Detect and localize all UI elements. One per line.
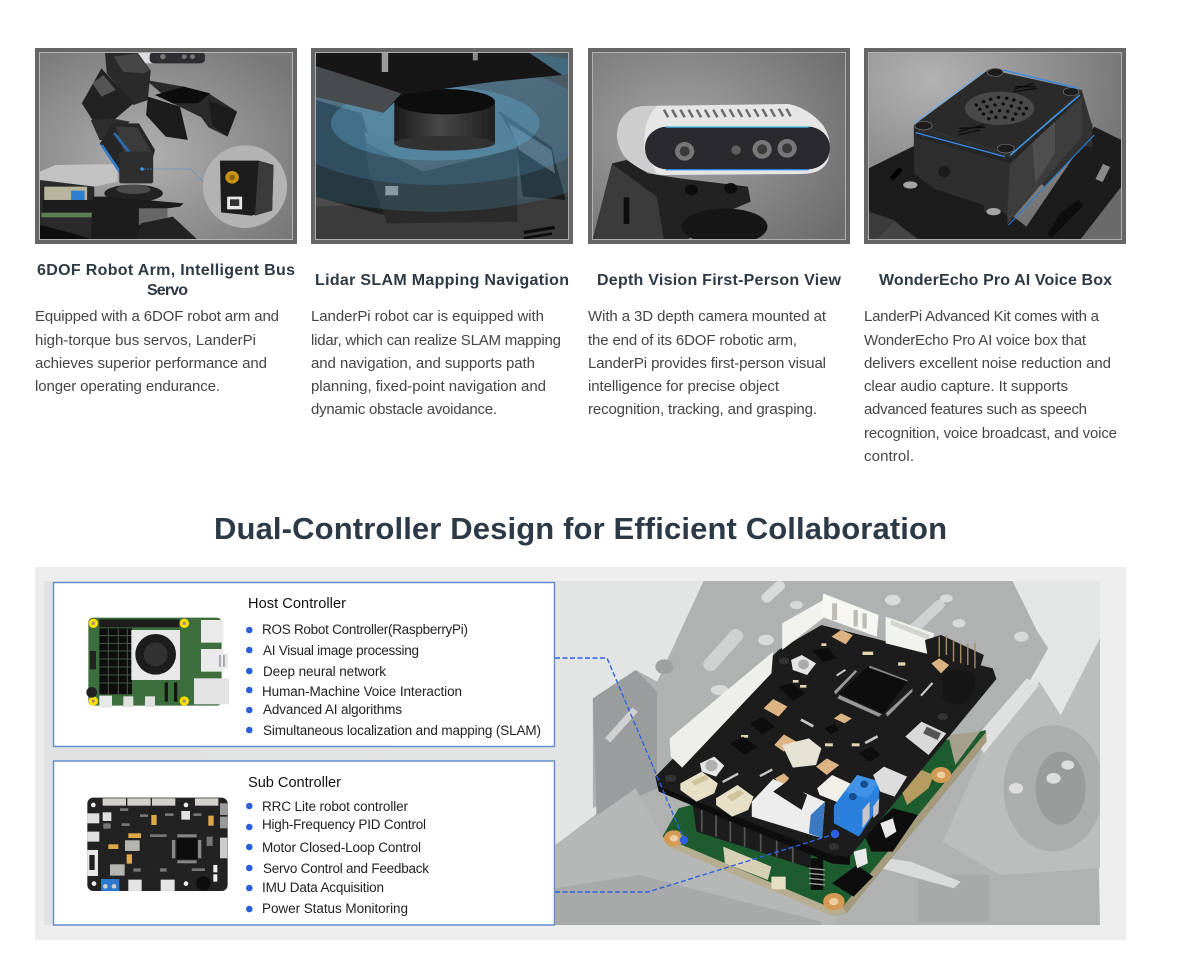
body: depth vision: recognition, tracking, and grasping.: [588, 401, 817, 418]
heading: robot arm: 6DOF Robot Arm, Intelligent Bus: [37, 262, 295, 279]
title: Dual-Controller Design for Efficient Collaboration: [214, 511, 947, 546]
panel: voice box image: [864, 48, 1126, 244]
body: depth vision: LanderPi provides first-person visual: [588, 355, 826, 372]
body: voice box: delivers excellent noise reduction and: [864, 355, 1111, 372]
text block: depth vision: [588, 272, 842, 418]
text block: voice box: [864, 272, 1117, 465]
body: lidar: planning, fixed-point navigation and: [311, 378, 546, 395]
body: voice box: advanced features such as speech: [864, 401, 1087, 418]
body: robot arm: [35, 308, 279, 395]
list: host controller features: Deep neural network: [263, 664, 386, 679]
body: voice box: [864, 308, 1117, 465]
body: voice box: LanderPi Advanced Kit comes with a: [864, 308, 1100, 325]
list: host controller features: Simultaneous localization and mapping (SLAM): [263, 723, 541, 738]
heading: robot arm: [37, 262, 295, 299]
list: host controller features: [246, 622, 541, 738]
list: host controller features: Advanced AI algorithms: [263, 702, 402, 717]
callout: sub controller: [54, 761, 554, 925]
body: depth vision: [588, 308, 827, 418]
body: voice box: clear audio capture. It supports: [864, 378, 1068, 395]
arrow: host controller leader line: [555, 658, 688, 844]
list: sub controller features: RRC Lite robot controller: [262, 799, 408, 814]
list: sub controller features: IMU Data Acquisition: [262, 880, 384, 895]
body: voice box: recognition, voice broadcast, and voice: [864, 425, 1117, 442]
list: sub controller features: [246, 799, 429, 916]
body: robot arm: Equipped with a 6DOF robot arm and: [35, 308, 279, 325]
list: sub controller features: Power Status Monitoring: [262, 901, 408, 916]
list: sub controller features: Servo Control and Feedback: [263, 861, 429, 876]
panel: lidar image: [311, 48, 573, 244]
illustration: Raspberry Pi board: [86, 618, 229, 708]
body: voice box: WonderEcho Pro AI voice box that: [864, 332, 1087, 349]
heading: depth vision: Depth Vision First-Person View: [597, 272, 842, 289]
body: depth vision: intelligence for precise object: [588, 378, 780, 395]
list: host controller features: ROS Robot Controller(RaspberryPi): [262, 622, 468, 637]
body: lidar: lidar, which can realize SLAM mapping: [311, 332, 561, 349]
body: depth vision: the end of its 6DOF robotic arm,: [588, 332, 797, 349]
heading: voice box: WonderEcho Pro AI Voice Box: [879, 272, 1112, 289]
image: controller boards on chassis: [555, 579, 1104, 926]
panel: depth camera image: [588, 48, 850, 245]
body: lidar: LanderPi robot car is equipped with: [311, 308, 544, 325]
list: host controller features: Human-Machine Voice Interaction: [262, 684, 462, 699]
body: depth vision: With a 3D depth camera mounted at: [588, 308, 827, 325]
panel: robot arm image: [35, 48, 297, 244]
body: lidar: [311, 308, 561, 418]
heading: robot arm: Servo: [147, 282, 188, 299]
heading: host controller: Host Controller: [248, 596, 346, 612]
body: lidar: dynamic obstacle avoidance.: [311, 401, 497, 418]
body: robot arm: longer operating endurance.: [35, 378, 220, 395]
illustration: RRC Lite board: [87, 798, 228, 891]
heading: lidar: Lidar SLAM Mapping Navigation: [315, 272, 569, 289]
arrow: sub controller leader line: [555, 830, 839, 892]
body: robot arm: achieves superior performance and: [35, 355, 267, 372]
text block: lidar: [311, 272, 569, 418]
body: robot arm: high-torque bus servos, LanderPi: [35, 332, 256, 349]
list: host controller features: AI Visual image processing: [263, 643, 419, 658]
heading: sub controller: Sub Controller: [248, 775, 341, 791]
list: sub controller features: High-Frequency PID Control: [262, 817, 426, 832]
panel: dual controller: [35, 567, 1126, 940]
body: lidar: and navigation, and supports path: [311, 355, 535, 372]
list: sub controller features: Motor Closed-Loop Control: [262, 840, 421, 855]
text block: robot arm: [35, 262, 295, 395]
callout: host controller: [54, 582, 554, 746]
body: voice box: control.: [864, 448, 914, 465]
